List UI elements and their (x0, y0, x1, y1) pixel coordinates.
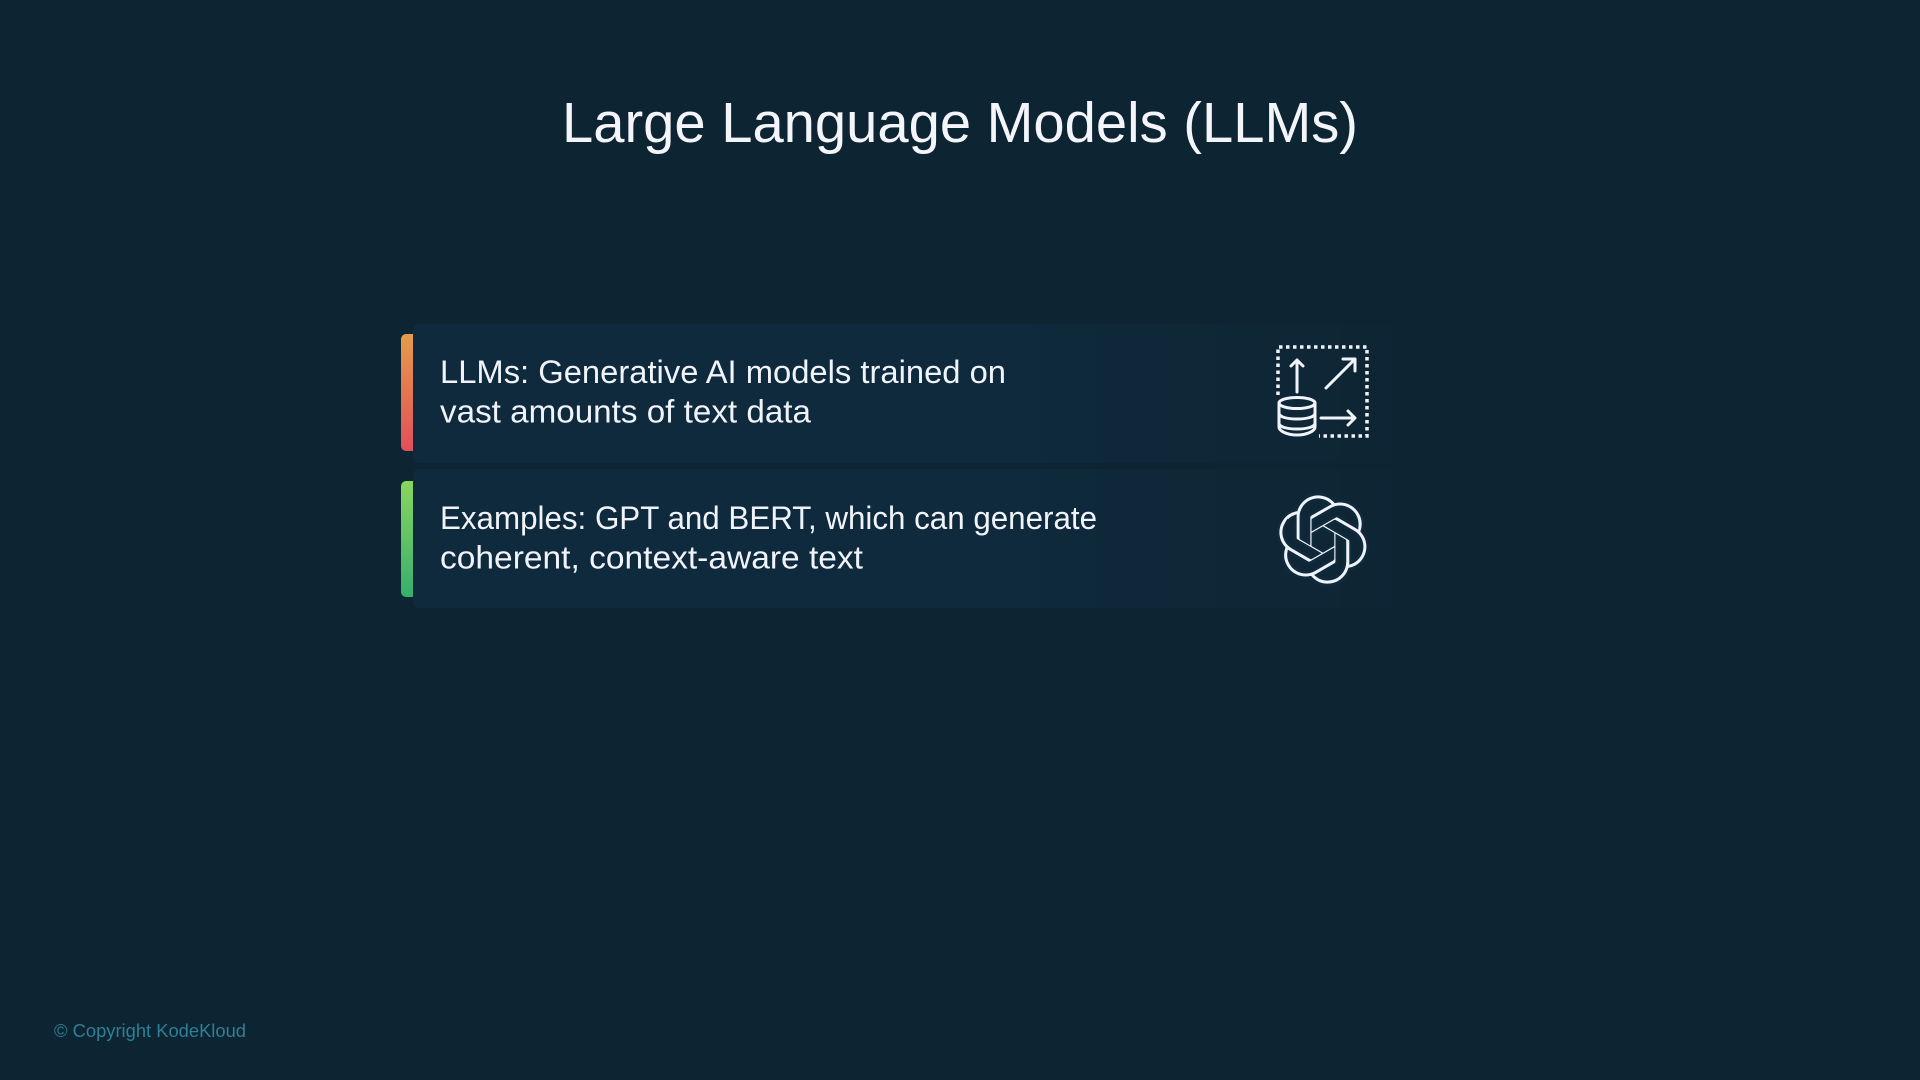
title: Large Language Models (LLMs) (562, 91, 1358, 155)
panel background (413, 324, 1450, 463)
accent bar: orange to red (401, 334, 413, 451)
text block: definition: LLMs: Generative AI models trained on (440, 354, 1006, 390)
text block: examples: Examples: GPT and BERT, which can generate (440, 500, 1097, 536)
panel: LLMs definition (401, 324, 1450, 463)
panel: examples (401, 469, 1450, 608)
text block: examples: coherent, context-aware text (440, 540, 863, 576)
text block: definition (440, 354, 1006, 430)
accent bar: green (401, 481, 413, 597)
copyright footer: © Copyright KodeKloud (54, 1021, 246, 1041)
panel background (413, 469, 1450, 608)
icon: data growth (1278, 347, 1367, 436)
text block: examples (440, 500, 1097, 576)
text block: definition: vast amounts of text data (440, 394, 811, 430)
icon: OpenAI knot (1278, 494, 1368, 585)
